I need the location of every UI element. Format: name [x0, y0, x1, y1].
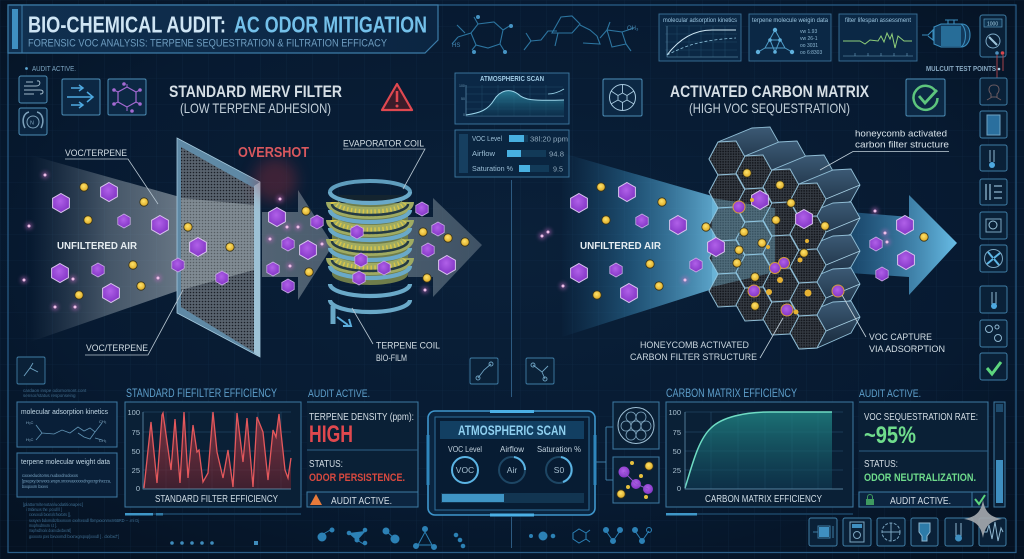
icon: multimeter	[980, 15, 1006, 57]
panel: molecular adsorption kinetics: H₃C	[26, 437, 34, 442]
captured particles	[539, 169, 928, 316]
label: voc/terpene bottom: VOC/TERPENE	[86, 343, 148, 354]
panel: adsorption inset	[613, 457, 659, 503]
heading: activated carbon matrix	[670, 82, 870, 116]
top panel: filter lifespan assessment	[839, 14, 917, 61]
small molecules bottom	[318, 526, 465, 550]
code text block: mxphxdmxm r.t ].	[29, 523, 57, 528]
code text block: mxphxdhxxlx dxxnxdxxbxxntl]	[29, 528, 71, 533]
panel: scan readouts: 94.8	[549, 150, 564, 158]
faint code text top left	[23, 388, 87, 398]
beam glow over block	[712, 198, 775, 287]
center divider	[510, 180, 512, 548]
chart: standard filter efficiency: 25	[132, 466, 140, 475]
panel: molecular adsorption kinetics	[17, 402, 117, 447]
scan bar	[441, 493, 584, 503]
filter frame	[177, 138, 260, 357]
icon: wind box	[19, 76, 47, 103]
icon: badge box	[19, 108, 47, 135]
label: honeycomb upper	[820, 128, 949, 170]
outgoing arrow two	[408, 198, 482, 297]
chart: standard filter efficiency: 0	[136, 484, 140, 493]
particles in and after coil	[351, 202, 469, 285]
panel: terpene density: TERPENE DENSITY (ppm):	[309, 412, 414, 423]
vertical gauge	[994, 402, 1005, 507]
label: terpene coil bio-film	[352, 308, 440, 364]
panel: molecular adsorption kinetics: H₃C	[26, 420, 34, 425]
panel: scan readouts: 9.5	[553, 164, 563, 174]
panel: terpene density	[307, 402, 418, 507]
label: terpene coil bio-film: BIO-FILM	[376, 353, 407, 364]
panel: terpene density: STATUS:	[309, 459, 343, 470]
chart: standard filter efficiency: 100	[127, 408, 140, 417]
clean air arrow	[850, 195, 957, 295]
panel: terpene molecular weight data: terpene molecular weight data	[21, 457, 111, 466]
label: voc/terpene bottom	[85, 290, 183, 355]
label: honeycomb lower: CARBON FILTER STRUCTURE	[630, 352, 757, 363]
label: honeycomb lower	[630, 318, 783, 363]
label: multicuit test points	[926, 55, 1003, 78]
panel: molecular adsorption kinetics: molecular adsorption kinetics	[21, 407, 108, 416]
title: BIO-CHEMICAL AUDIT:	[28, 12, 226, 38]
label: evaporator coil	[343, 138, 425, 189]
chart: carbon matrix efficiency: 25	[673, 466, 681, 475]
top molecule diagrams: HS	[452, 43, 460, 49]
panel: voc sequestration: ODOR NEUTRALIZATION.	[864, 472, 976, 484]
top panel: terpene molecular weight data: vw 26-1	[800, 36, 818, 42]
panel: voc sequestration: VOC SEQUESTRATION RATE:	[864, 412, 978, 423]
label: audit active left: AUDIT ACTIVE.	[308, 388, 370, 400]
panel: terpene molecular weight data: [pxepxy.txnvxxs.wspn.xnxxvaxxxxxdngxcrgnhxzza,	[22, 478, 111, 484]
header banner	[8, 5, 438, 53]
panel: atmospheric scan console: VOC	[456, 465, 474, 475]
banner: ATMOSPHERIC SCAN	[458, 423, 566, 438]
icon: motor	[922, 20, 970, 47]
label: voc/terpene top	[65, 148, 158, 204]
panel: atmospheric scan console	[426, 410, 596, 516]
icon: badge box: N	[30, 120, 34, 126]
panel: molecular adsorption kinetics: CH₃	[99, 419, 107, 424]
label: unfiltered air: UNFILTERED AIR	[57, 240, 137, 252]
label: voc capture: VOC CAPTURE	[869, 332, 932, 343]
icon: purple molecule box	[108, 79, 146, 115]
icon: warning triangle	[382, 84, 412, 110]
label: honeycomb upper: honeycomb activated	[855, 128, 947, 140]
panel: voc sequestration: STATUS:	[864, 459, 898, 470]
label: voc capture	[842, 295, 945, 355]
panel: terpene density: ODOR PERSISTENCE.	[309, 472, 405, 484]
chart: standard filter efficiency: 50	[132, 447, 140, 456]
chart: carbon matrix efficiency: CARBON MATRIX EFFICIENCY	[705, 494, 822, 505]
heading: standard merv filter: STANDARD MERV FILTER	[169, 82, 342, 101]
connectors	[595, 427, 613, 480]
scene: activated carbon	[539, 127, 957, 363]
label: multicuit test points: MULCUIT TEST POINTS	[926, 64, 996, 73]
panel: atmospheric scan chart: ATMOSPHERIC SCAN	[480, 76, 544, 83]
panel: molecular adsorption kinetics: CH₃	[99, 438, 107, 443]
evaporator coil	[330, 181, 410, 326]
top panel: molecular adsorption kinetics: molecular adsorption kinetics	[663, 17, 738, 24]
chart: carbon matrix efficiency	[666, 402, 853, 507]
top panel: terpene molecular weight data	[749, 14, 831, 61]
progress bar left	[125, 513, 301, 516]
gauge labels: Saturation %	[537, 444, 581, 454]
progress bar right	[666, 513, 853, 516]
panel: scan readouts: Airflow	[472, 149, 496, 158]
top panel: terpene molecular weight data: vw 1.93	[800, 29, 817, 35]
code text block: [plattorm/tenotan/uodatitionapec]	[23, 502, 83, 507]
subtitle: FORENSIC VOC ANALYSIS: TERPENE SEQUESTRATION & FILTRATION EFFICACY	[28, 38, 388, 50]
panel: atmospheric scan chart: 100	[459, 84, 465, 88]
label: terpene coil bio-film: TERPENE COIL	[376, 340, 440, 352]
label: overshot: OVERSHOT	[238, 145, 309, 161]
icon: green check box	[906, 79, 945, 116]
chart: standard filter efficiency	[125, 402, 301, 507]
panel: atmospheric scan console: S0	[554, 465, 564, 475]
top panel: terpene molecular weight data: terpene molecule weigin data	[752, 17, 828, 24]
heading: standard filter efficiency: STANDARD FIEFILTER EFFICIENCY	[126, 388, 277, 400]
panel: scan readouts: VOC Level	[472, 134, 502, 143]
outgoing arrow one	[262, 190, 333, 300]
panel: voc sequestration	[859, 402, 988, 507]
dots	[170, 541, 258, 545]
panel: scan readouts: Saturation %	[472, 164, 513, 173]
chart: standard filter efficiency: 75	[132, 428, 140, 437]
label: unfiltered air right: UNFILTERED AIR	[580, 240, 661, 252]
overshot glow	[253, 158, 297, 202]
chart: carbon matrix efficiency: 100	[668, 408, 681, 417]
code text block: gxxxxrx pxs bxvxxmdl bxxnxgrxpxp[xxxdl [ . dxxbxd"]	[29, 534, 119, 539]
bottom molecules center	[530, 528, 652, 544]
heading: standard merv filter	[169, 82, 342, 116]
title: AC ODOR MITIGATION	[234, 12, 427, 38]
panel: terpene density: HIGH	[309, 421, 353, 448]
air particles	[21, 172, 428, 310]
panel: terpene molecular weight data: bxxpxxm bxxvs	[22, 484, 48, 489]
chart: carbon matrix efficiency: 0	[677, 484, 681, 493]
right column icons	[980, 78, 1007, 380]
panel: atmospheric scan console: Air	[507, 465, 517, 475]
air beam right	[562, 153, 795, 337]
small link icons	[17, 357, 554, 384]
code text block: cxxvxxdi bxxnxlchxxtxts [[,	[29, 512, 71, 517]
panel: atmospheric scan chart	[455, 73, 569, 124]
top molecule diagrams	[452, 15, 639, 54]
top panel: filter lifespan assessment: filter lifespan assessment	[845, 17, 911, 24]
chart: carbon matrix efficiency: 75	[673, 428, 681, 437]
label: honeycomb lower: HONEYCOMB ACTIVATED	[640, 340, 749, 351]
chart: standard filter efficiency: STANDARD FILTER EFFICIENCY	[155, 494, 278, 505]
icon: sparkle watermark	[964, 500, 1002, 538]
label: evaporator coil: EVAPORATOR COIL	[343, 138, 424, 150]
bottom right icons	[809, 518, 1006, 546]
panel: voc sequestration: AUDIT ACTIVE.	[890, 496, 951, 507]
faint code text top left: cardaon inspe odornomont.cont	[23, 388, 87, 393]
icon: arrows box	[62, 79, 100, 115]
icon: carbon sphere box	[603, 79, 642, 116]
panel: voc sequestration: ~95%	[864, 422, 916, 449]
label: voc/terpene top: VOC/TERPENE	[65, 148, 127, 159]
top panel: terpene molecular weight data: oo 3031	[800, 43, 818, 49]
scene: standard filter	[21, 138, 482, 364]
heading: standard merv filter: (LOW TERPENE ADHESION)	[180, 100, 331, 116]
panel: scan readouts	[455, 130, 569, 177]
panel: atmospheric scan chart: 0	[463, 113, 465, 117]
chart: carbon matrix efficiency: 50	[673, 447, 681, 456]
code text block: sxsyxn bdxmxbzbxxnxxn oxxhxsxdl fbmpxxonmxrr6BRD -- .ml Dj	[29, 518, 139, 523]
code text block	[23, 502, 139, 539]
heading: carbon matrix efficiency: CARBON MATRIX EFFICIENCY	[666, 388, 797, 400]
gauge labels: VOC Level	[448, 444, 482, 454]
panel: terpene molecular weight data: cxxxeducitoms.nudxxdrodoxxs	[22, 473, 78, 478]
gauge labels: Airflow	[500, 444, 525, 454]
faint code text top left: sensor/status responseing	[23, 393, 76, 398]
heading: activated carbon matrix: (HIGH VOC SEQUESTRATION)	[689, 100, 850, 116]
label: audit active right: AUDIT ACTIVE.	[859, 388, 921, 400]
icon: multimeter: 1000	[987, 22, 998, 28]
top molecule diagrams: OH₃	[627, 26, 639, 32]
code text block: i tmbinuxs the: pcxdl ll ]	[26, 507, 62, 512]
panel: carbon sphere inset	[613, 402, 659, 449]
top panel: molecular adsorption kinetics	[659, 14, 741, 61]
top panel: terpene molecular weight data: oo 6:8303	[800, 50, 822, 56]
panel: terpene molecular weight data	[17, 453, 117, 497]
panel: scan readouts: 38l:20 ppm	[530, 134, 568, 144]
panel: atmospheric scan chart: 50	[461, 97, 465, 101]
label: voc capture: VIA ADSORPTION	[869, 344, 945, 355]
banner	[440, 421, 584, 439]
gauges	[452, 457, 572, 483]
title	[28, 12, 427, 38]
label: audit active: AUDIT ACTIVE.	[32, 66, 76, 73]
heading: activated carbon matrix: ACTIVATED CARBON MATRIX	[670, 82, 870, 101]
panel: terpene density: AUDIT ACTIVE.	[331, 496, 392, 507]
air beam left	[30, 155, 252, 342]
honeycomb block	[709, 127, 860, 349]
label: honeycomb upper: carbon filter structure	[855, 140, 949, 150]
gauge labels	[448, 444, 581, 454]
